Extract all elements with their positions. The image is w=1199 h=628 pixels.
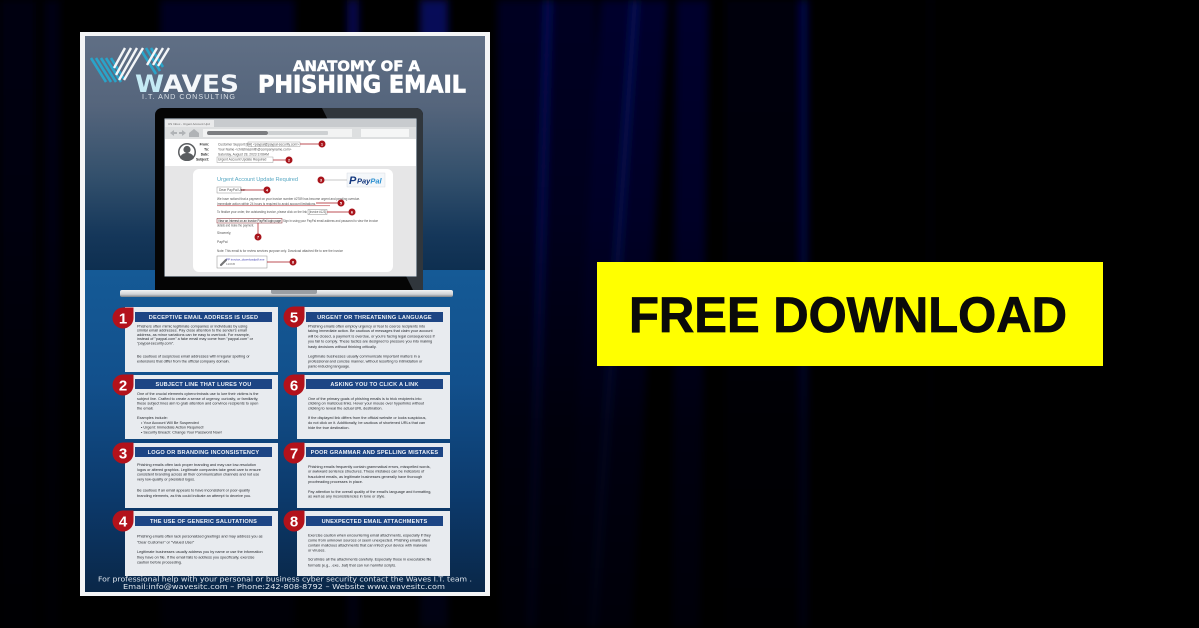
attachment	[217, 256, 267, 268]
panel 7: poor grammar and spelling: Pay attention to the overall quality of the email's language and formatting,	[308, 490, 431, 494]
email window	[164, 118, 416, 276]
logo: Waves I.T. and Consulting: I.T. AND CONSULTING	[142, 92, 235, 101]
panel 5: urgent or threatening language: panic-inducing language.	[308, 364, 350, 368]
email header fields: From:	[200, 142, 209, 146]
panel 3: logo or branding: logos or altered graphics. Legitimate companies take great care to ensure	[137, 468, 261, 472]
panel 3: logo or branding: Phishing emails often lack proper branding and may use low-resolution	[137, 463, 256, 467]
email title: Urgent Account Update Required	[217, 177, 298, 183]
panel 5: urgent or threatening language	[284, 306, 450, 372]
panel 3: logo or branding: LOGO OR BRANDING INCONSISTENCY	[148, 450, 259, 456]
panel 6: asking you to click a link: ASKING YOU TO CLICK A LINK	[330, 382, 419, 388]
attachment: PP invoice_downloadpdf.exe	[226, 258, 265, 262]
email body text: Note: This email is for review services purpose only. Download attached file to see the invoice	[217, 249, 343, 253]
panel 2: subject line: these subject lines aim to grab attention and convince recipients to open	[137, 402, 258, 406]
panel 1: deceptive email address: Phishers often mimic legitimate companies or individuals by using	[137, 324, 247, 328]
numbered callouts on the email: 6	[351, 210, 354, 214]
panel 4: generic salutations	[112, 510, 278, 576]
panel 2: subject line: • Security Breach: Change Your Password Now!	[141, 430, 222, 434]
panel 8: unexpected attachments: Exercise caution when encountering email attachments, especially if they	[308, 533, 431, 537]
email body text: PayPal	[217, 240, 228, 244]
panel 6: asking you to click a link: If the displayed link differs from the official website or looks suspicious,	[308, 416, 426, 420]
footer contact text	[98, 574, 472, 591]
panel 6: asking you to click a link: 6	[290, 378, 298, 394]
laptop with phishing email on screen	[120, 108, 453, 297]
panel 7: poor grammar and spelling: POOR GRAMMAR AND SPELLING MISTAKES	[311, 450, 438, 456]
numbered callouts on the email: 4	[266, 188, 269, 192]
panel 8: unexpected attachments: UNEXPECTED EMAIL ATTACHMENTS	[322, 519, 427, 525]
panel 6: asking you to click a link: hide the true destination.	[308, 426, 350, 430]
email body text: Sincerely,	[217, 231, 231, 235]
panel 7: poor grammar and spelling: as well as any inconsistencies in tone or style.	[308, 494, 385, 498]
panel 2: subject line: subject line. Crafted to create a sense of urgency, curiosity, or familiarity,	[137, 397, 258, 401]
numbered callouts on the email: 3	[320, 178, 323, 182]
panel 4: generic salutations: THE USE OF GENERIC SALUTATIONS	[150, 519, 257, 525]
logo: Waves I.T. and Consulting	[91, 48, 239, 101]
panel 2: subject line: SUBJECT LINE THAT LURES YOU	[156, 382, 251, 388]
panel 1: deceptive email address: similar email addresses. Pay close attention to the sender's email	[137, 329, 247, 333]
panel 8: unexpected attachments	[284, 510, 450, 576]
panel 5: urgent or threatening language: URGENT OR THREATENING LANGUAGE	[317, 315, 432, 321]
panel 3: logo or branding	[112, 442, 278, 508]
numbered callouts on the email: 5	[340, 200, 343, 206]
email body text: To finalize your order, the outstanding invoice, please click on the link	[217, 210, 307, 214]
panel 7: poor grammar and spelling: 7	[290, 446, 298, 462]
footer contact text: Email:info@wavesitc.com – Phone:242-808-8792 – Website www.wavesitc.com	[123, 582, 445, 591]
panel 3: logo or branding: branding elements, as this could indicate an attempt to deceive you.	[137, 494, 251, 498]
panel 6: asking you to click a link: clicking on malicious links. Hover your mouse over hyperlinks without	[308, 402, 425, 406]
email body text: [Invoice #123]	[309, 210, 326, 214]
panel 7: poor grammar and spelling: Phishing emails frequently contain grammatical errors, misspelled words,	[308, 465, 431, 469]
panel 1: deceptive email address	[112, 307, 278, 372]
email header fields: Saturday, August 28, 2023 3:08AM	[218, 152, 269, 156]
panel 1: deceptive email address: 1	[119, 310, 127, 328]
panel 8: unexpected attachments: or viruses.	[308, 548, 326, 552]
panel 3: logo or branding: Be cautious if an email appears to have inconsistent or poor-quality	[137, 488, 250, 492]
email body text: Immediate action within 24 hours is required to avoid account limitations.	[217, 202, 316, 206]
panel 3: logo or branding: consistent branding across all their communication channels and not use	[137, 473, 259, 477]
panel 5: urgent or threatening language: professional and concise manner, without resorting to intimidation or	[308, 359, 423, 363]
panel 8: unexpected attachments: contain malicious attachments that can infect your device with malware	[308, 543, 427, 547]
panel 4: generic salutations: caution before proceeding.	[137, 561, 182, 565]
panel 2: subject line: • Your Account Will Be Suspended	[141, 421, 199, 425]
panel 4: generic salutations: Phishing emails often lack personalized greetings and may address you as	[137, 534, 263, 538]
panel 1: deceptive email address: address, as minor variations can be easy to overlook. For example,	[137, 333, 250, 337]
email body text	[217, 187, 378, 253]
panel 5: urgent or threatening language: Legitimate businesses usually communicate important matters in a	[308, 354, 421, 358]
email body text: Sign in using your PayPal email address and password to view the invoice	[283, 219, 378, 223]
email header fields: Subject:	[196, 158, 209, 162]
title: ANATOMY OF A	[293, 59, 421, 75]
title	[258, 59, 466, 99]
panel 6: asking you to click a link: clicking to reveal the actual URL destination.	[308, 407, 383, 411]
panel 1: deceptive email address: extensions that differ from the official company domain.	[137, 359, 230, 363]
panel 1: deceptive email address: Be cautious of suspicious email addresses with irregular spelling or	[137, 354, 250, 358]
panel 2: subject line: • Urgent: Immediate Action Required!	[141, 426, 204, 430]
panel 2: subject line: 2	[119, 378, 127, 394]
panel 7: poor grammar and spelling	[284, 442, 450, 508]
panel 5: urgent or threatening language: taking immediate action. Be cautious of messages that claim your account	[308, 329, 433, 333]
panel 7: poor grammar and spelling: or awkward sentence structures. These mistakes can be indicators of	[308, 470, 425, 474]
email body text: We have noticed that a payment on your invoice number #2789 has become urgent and pending overdue.	[217, 197, 360, 201]
numbered callouts on the email: 7	[257, 234, 260, 240]
panel 6: asking you to click a link: One of the primary goals of phishing emails is to trick recipients into	[308, 397, 422, 401]
panel 8: unexpected attachments: Scrutinize all the attachments carefully. Especially those in executable file	[308, 558, 431, 562]
panel 4: generic salutations: 4	[119, 514, 128, 530]
panel 2: subject line: Examples include:	[137, 416, 168, 420]
panel 2: subject line: One of the crucial elements cybercriminals use to lure their victims is the	[137, 392, 259, 396]
browser toolbar icons	[170, 129, 199, 137]
title: PHISHING EMAIL	[258, 71, 466, 99]
email body text: View an Interest on an invoice PayPal login page	[218, 219, 281, 223]
panel 5: urgent or threatening language: you fail to comply. These tactics are designed to pressure you into making	[308, 340, 432, 344]
email body text: Dear PayPal User	[219, 188, 246, 192]
email header fields	[196, 142, 300, 162]
panel 7: poor grammar and spelling: proofreading processes in place.	[308, 480, 363, 484]
panel 5: urgent or threatening language: will be closed, a payment is overdue, or you're facing legal consequences if	[308, 334, 435, 338]
panel 4: generic salutations: "Dear Customer" or "Valued User"	[137, 540, 195, 544]
panel 8: unexpected attachments: come from unknown sources or seem unexpected. Phishing emails often	[308, 538, 430, 542]
panel 4: generic salutations: Legitimate businesses usually address you by name or use the information	[137, 550, 263, 554]
panel 8: unexpected attachments: formats (e.g., .exe, .bat) that can run harmful scripts.	[308, 563, 396, 567]
panel 5: urgent or threatening language: hasty decisions without thinking critically.	[308, 345, 377, 349]
panel 5: urgent or threatening language: 5	[290, 310, 298, 326]
poster: anatomy of a phishing email	[80, 32, 490, 596]
numbered callouts on the email: 1	[321, 142, 324, 146]
panel 3: logo or branding: very low-quality or pixelated logos.	[137, 477, 195, 481]
panel 4: generic salutations: they have on file. If the email fails to address you specifically, exercise	[137, 555, 254, 559]
address bar	[203, 129, 409, 137]
panel 1: deceptive email address: "paypal-security.com".	[137, 341, 174, 345]
panel 6: asking you to click a link	[284, 374, 450, 439]
logo: Waves I.T. and Consulting: WAVES	[135, 70, 239, 98]
email window: US Inbox - Urgent Account Upd	[168, 122, 210, 126]
PayPal logo: P	[349, 175, 357, 187]
free download banner	[597, 262, 1103, 366]
panel 3: logo or branding: 3	[119, 446, 127, 462]
numbered callouts on the email: 8	[292, 260, 295, 264]
PayPal logo	[347, 173, 385, 187]
panel 8: unexpected attachments: 8	[290, 514, 298, 530]
email header fields: Date:	[201, 152, 209, 156]
attachment: 120KB	[226, 262, 235, 266]
numbered callouts on the email: 2	[288, 158, 291, 162]
panel 1: deceptive email address: instead of "paypal.com" a fake email may come from "paypal.com" or	[137, 337, 254, 341]
panel 2: subject line	[112, 374, 278, 439]
free download banner: FREE DOWNLOAD	[629, 286, 1067, 343]
email header fields: Your Name <christinasmith@companyname.com>	[218, 148, 291, 152]
panel 5: urgent or threatening language: Phishing emails often employ urgency or fear to coerce recipients into	[308, 324, 425, 328]
laptop base	[120, 290, 453, 297]
panel 7: poor grammar and spelling: fraudulent emails, as legitimate businesses generally have thorough	[308, 475, 422, 479]
footer contact text: For professional help with your personal or business cyber security contact the Waves I.T. team .	[98, 574, 472, 584]
PayPal logo: PayPal	[357, 176, 383, 186]
email header fields: Urgent Account Update Required	[218, 158, 267, 162]
panel 2: subject line: the email.	[137, 406, 153, 410]
email header fields: To:	[204, 148, 209, 152]
sender avatar	[178, 143, 196, 161]
panel 1: deceptive email address: DECEPTIVE EMAIL ADDRESS IS USED	[149, 315, 258, 321]
numbered callouts on the email	[241, 140, 356, 266]
email body text: details and make the payment.	[217, 224, 254, 228]
email header fields: Customer Support [BH] <paypal@paypal-security.com>	[218, 142, 299, 146]
panel 6: asking you to click a link: do not click on it. Additionally, be cautious of shortened URLs that can	[308, 421, 425, 425]
